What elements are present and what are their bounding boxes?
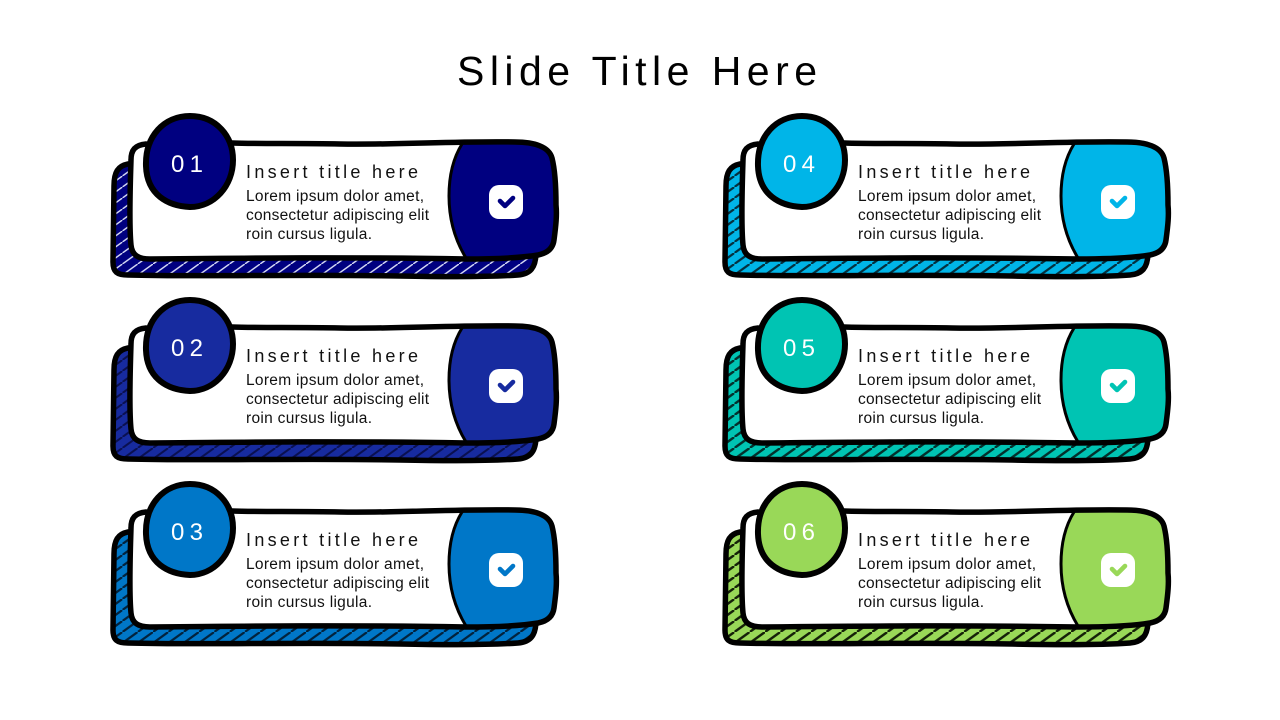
- tab divider: [1061, 328, 1078, 442]
- panel: card 04: [725, 116, 1168, 277]
- body text: Lorem ipsum dolor amet,: [858, 188, 1036, 205]
- body text: Lorem ipsum dolor amet,: [858, 372, 1036, 389]
- coloured tab: [1061, 326, 1168, 442]
- card outline: [130, 326, 556, 443]
- white card body: [742, 326, 1168, 443]
- body text: roin cursus ligula.: [858, 226, 984, 243]
- tab divider: [449, 512, 466, 626]
- icon: check: [1101, 185, 1135, 219]
- body text: consectetur adipiscing elit: [246, 391, 430, 408]
- heading: Insert title here: [246, 162, 418, 182]
- number: 05: [783, 335, 815, 362]
- number: 02: [171, 335, 203, 362]
- heading: Insert title here: [858, 162, 1030, 182]
- coloured tab: [449, 142, 556, 258]
- card outline: [130, 142, 556, 259]
- heading: Insert title here: [858, 346, 1030, 366]
- tab divider: [449, 144, 466, 258]
- white card body: [130, 142, 556, 259]
- coloured tab: [449, 510, 556, 626]
- body text: consectetur adipiscing elit: [858, 575, 1042, 592]
- card outline: [130, 510, 556, 627]
- number badge: [758, 484, 845, 575]
- number badge: [758, 300, 845, 391]
- hatched back layer: [725, 348, 1148, 461]
- body text: roin cursus ligula.: [246, 594, 372, 611]
- coloured tab: [449, 326, 556, 442]
- number: 03: [171, 519, 203, 546]
- tab divider: [1061, 512, 1078, 626]
- heading: Insert title here: [246, 346, 418, 366]
- icon: check: [1101, 369, 1135, 403]
- card outline: [742, 142, 1168, 259]
- number badge: [146, 116, 233, 207]
- body text: roin cursus ligula.: [858, 410, 984, 427]
- body text: roin cursus ligula.: [858, 594, 984, 611]
- hatched back layer: [725, 164, 1148, 277]
- coloured tab: [1061, 142, 1168, 258]
- coloured tab: [1061, 510, 1168, 626]
- body text: roin cursus ligula.: [246, 226, 372, 243]
- hatched back layer: [113, 164, 536, 277]
- number badge: [758, 116, 845, 207]
- number: 01: [171, 151, 203, 178]
- white card body: [130, 326, 556, 443]
- number: 06: [783, 519, 815, 546]
- body text: consectetur adipiscing elit: [858, 207, 1042, 224]
- tab divider: [449, 328, 466, 442]
- body text: Lorem ipsum dolor amet,: [858, 556, 1036, 573]
- hatched back layer: [113, 348, 536, 461]
- body text: consectetur adipiscing elit: [858, 391, 1042, 408]
- number: 04: [783, 151, 815, 178]
- heading: Insert title here: [858, 530, 1030, 550]
- hatched back layer: [725, 532, 1148, 645]
- panel: card 05: [725, 300, 1168, 461]
- icon: check: [489, 185, 523, 219]
- number badge: [146, 484, 233, 575]
- body text: consectetur adipiscing elit: [246, 207, 430, 224]
- body text: Lorem ipsum dolor amet,: [246, 188, 424, 205]
- heading: Insert title here: [246, 530, 418, 550]
- tab divider: [1061, 144, 1078, 258]
- panel: card 06: [725, 484, 1168, 645]
- hatched back layer: [113, 532, 536, 645]
- panel: card 02: [113, 300, 556, 461]
- white card body: [130, 510, 556, 627]
- body text: consectetur adipiscing elit: [246, 575, 430, 592]
- number badge: [146, 300, 233, 391]
- icon: check: [1101, 553, 1135, 587]
- title: Slide Title Here: [457, 48, 817, 94]
- body text: Lorem ipsum dolor amet,: [246, 372, 424, 389]
- white card body: [742, 510, 1168, 627]
- body text: Lorem ipsum dolor amet,: [246, 556, 424, 573]
- card outline: [742, 510, 1168, 627]
- body text: roin cursus ligula.: [246, 410, 372, 427]
- white card body: [742, 142, 1168, 259]
- card outline: [742, 326, 1168, 443]
- icon: check: [489, 553, 523, 587]
- icon: check: [489, 369, 523, 403]
- panel: card 03: [113, 484, 556, 645]
- panel: card 01: [113, 116, 556, 277]
